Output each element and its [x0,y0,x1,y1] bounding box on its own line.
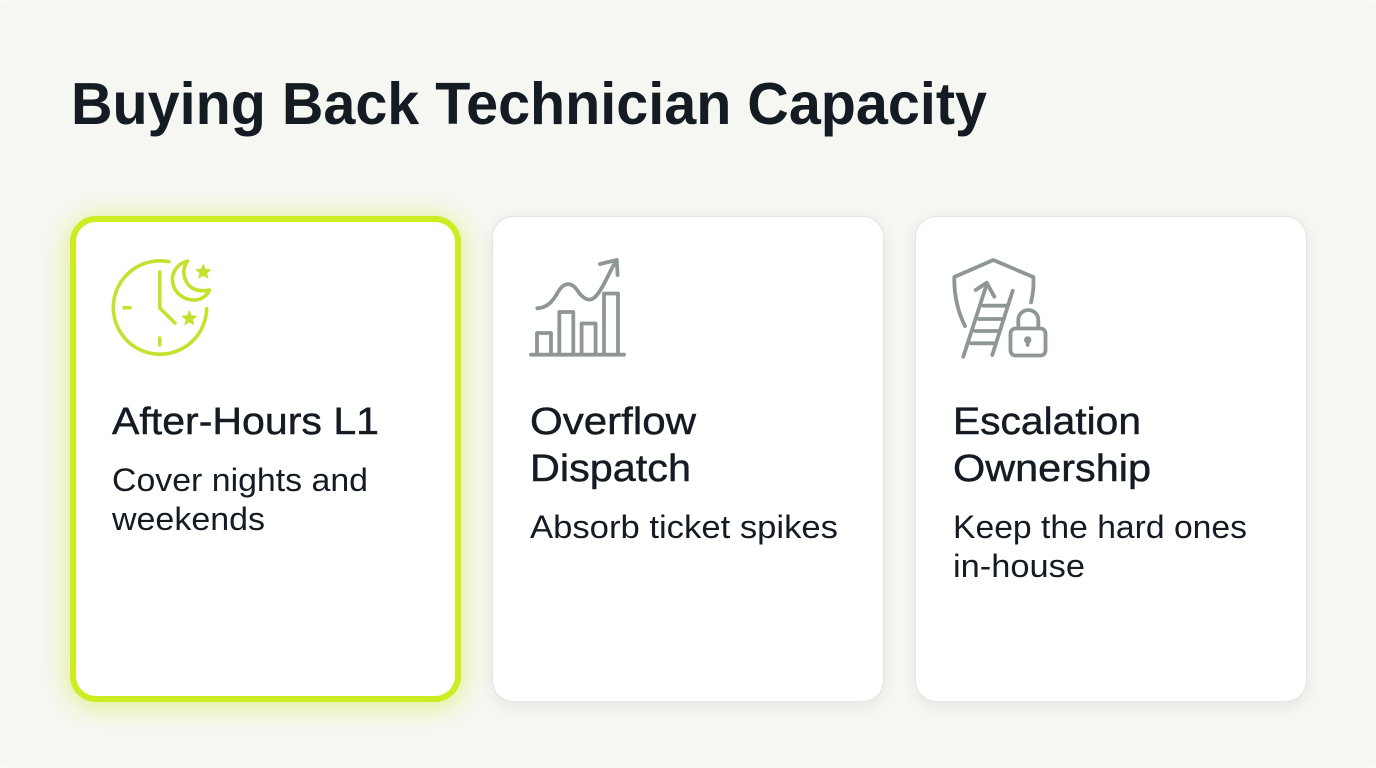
description: Absorb ticket spikes [530,509,838,545]
panel: Overflow Dispatch [492,216,884,706]
icon: shield, ladder and padlock [954,260,1046,357]
heading [953,401,1151,490]
description: in-house [953,548,1085,584]
heading: Overflow [530,401,697,443]
icon: bar chart with rising arrow [531,260,624,355]
description: Cover nights and [112,462,368,498]
heading: After-Hours L1 [112,401,379,443]
panel: Escalation Ownership [915,216,1307,706]
description [953,509,1247,584]
heading: Ownership [953,448,1151,490]
description: weekends [111,501,265,537]
title: Buying Back Technician Capacity [71,71,987,137]
panel: After-Hours L1 [68,217,463,707]
heading: Escalation [953,401,1141,443]
description: Keep the hard ones [953,509,1247,545]
description [111,462,368,537]
heading: Dispatch [530,448,691,490]
heading [530,401,697,490]
icon: clock with moon and stars [113,261,210,354]
